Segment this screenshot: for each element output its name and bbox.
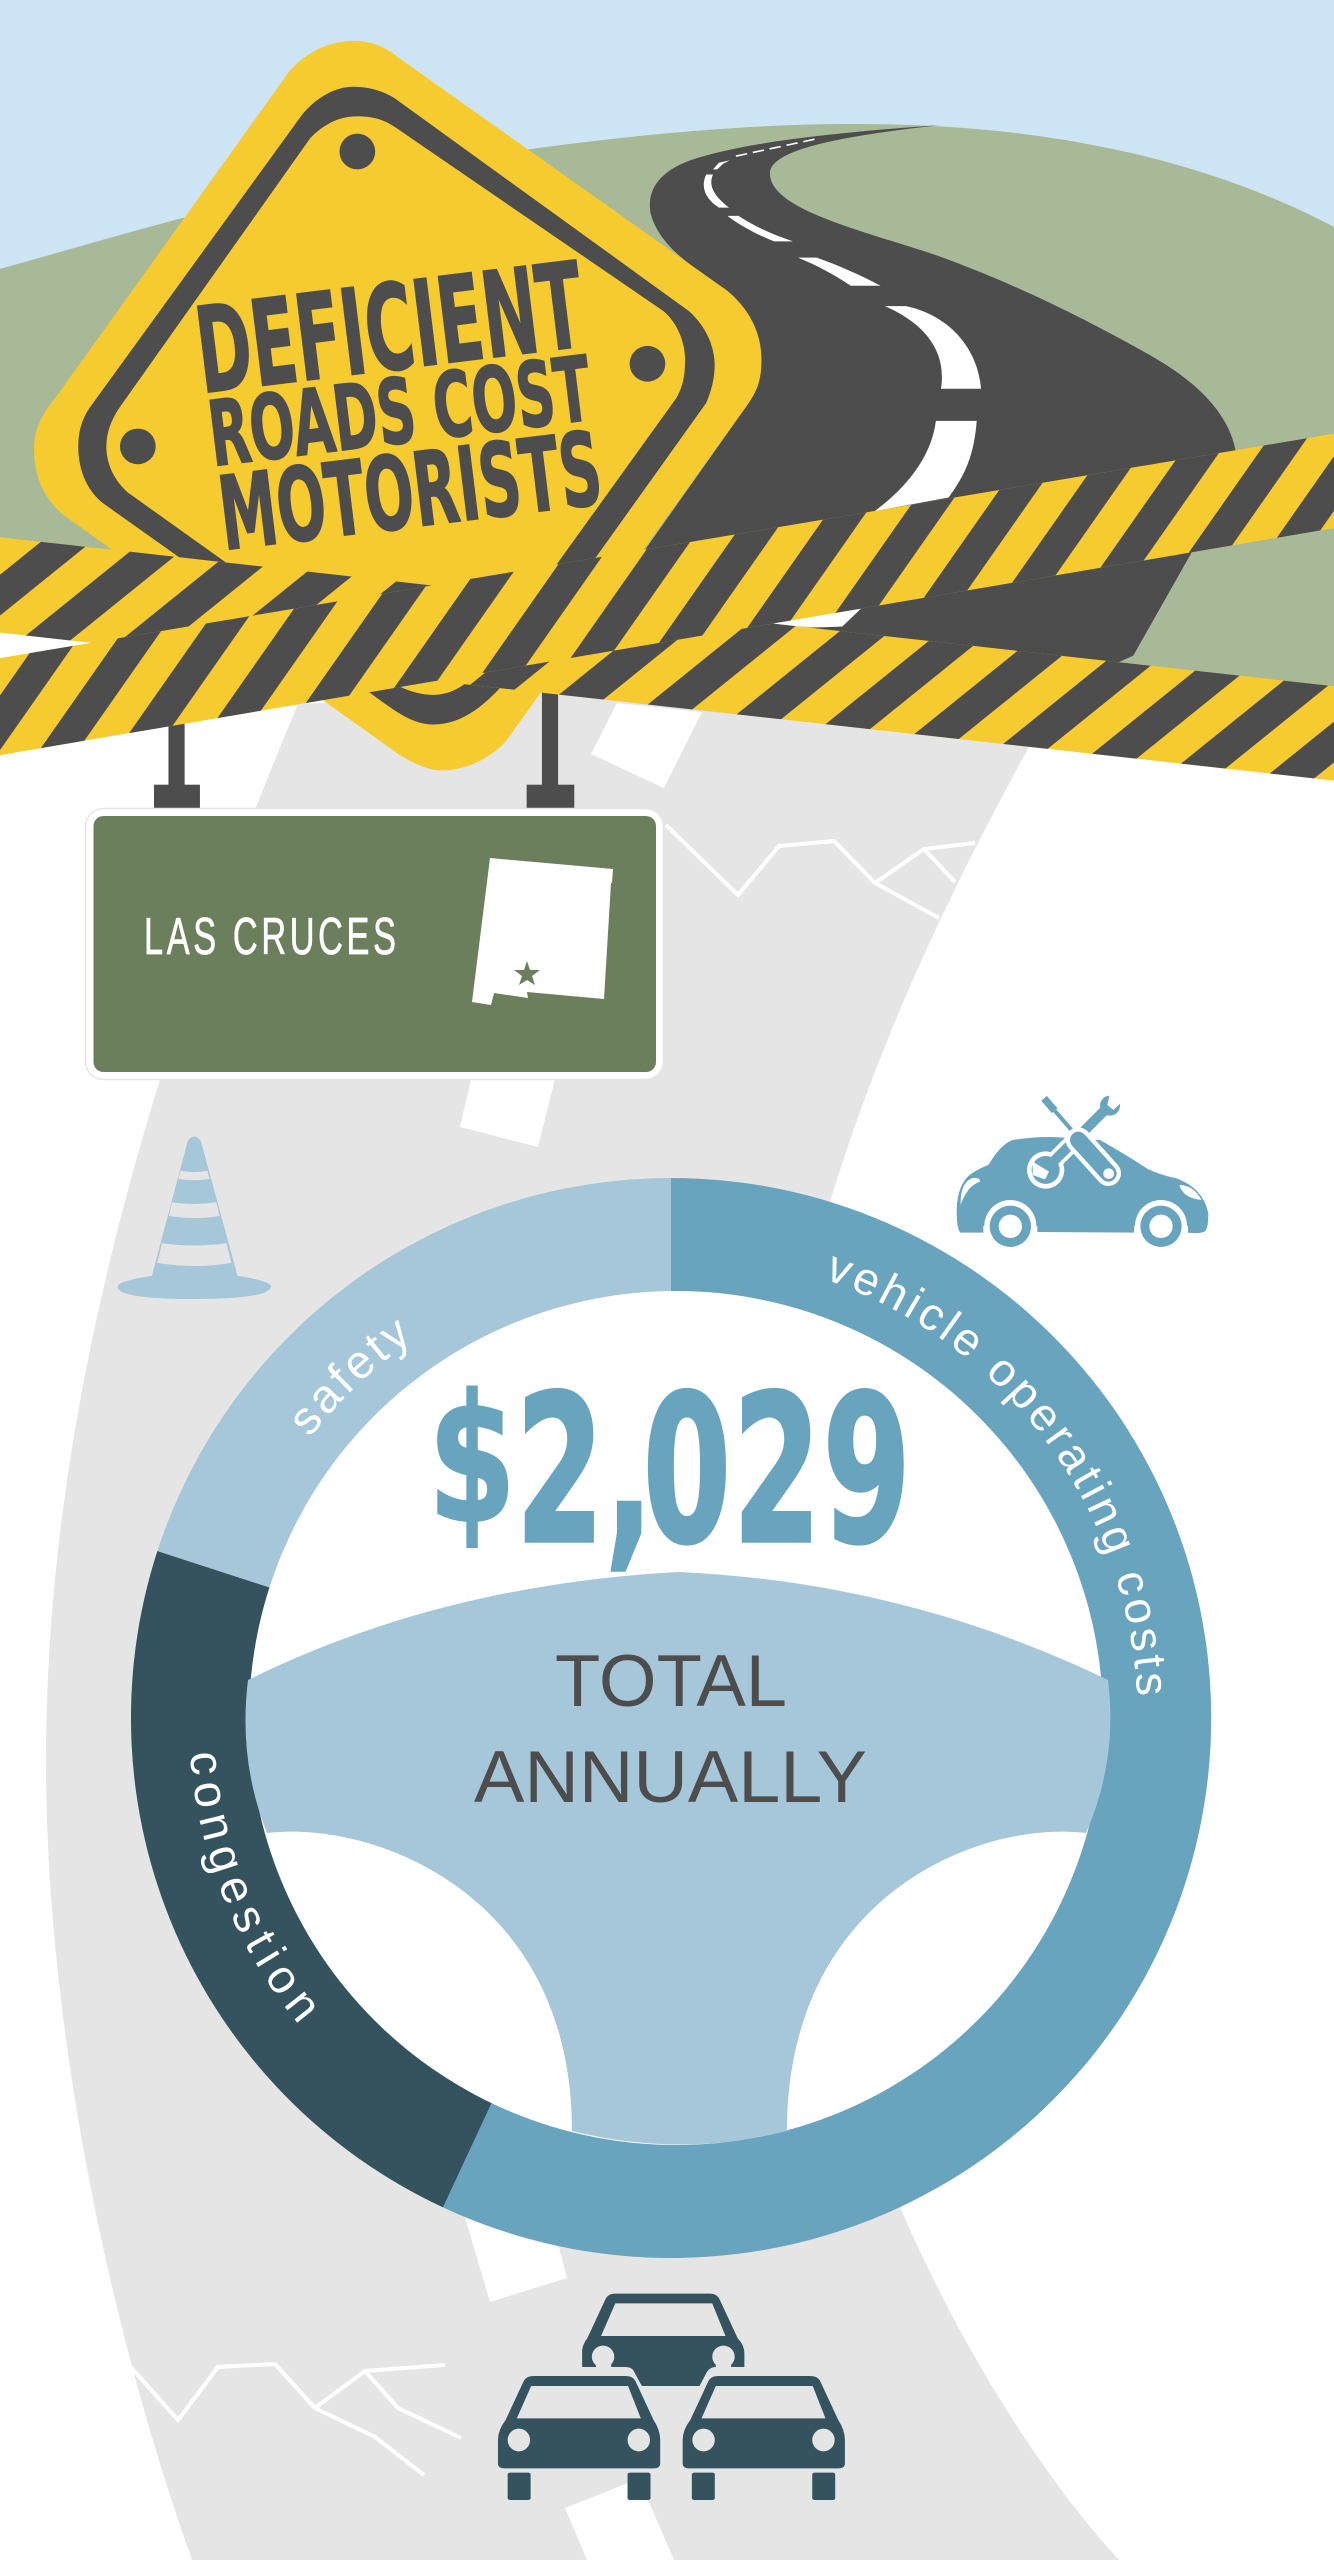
- total caption line 1: TOTAL: [555, 1641, 787, 1722]
- lane dash 3: [457, 2190, 567, 2302]
- title: MOTORISTS: [213, 410, 608, 575]
- caution tape lower band: [0, 537, 1334, 781]
- diamond warning sign: [34, 41, 761, 770]
- label: vehicle operating costs: vehicle operating costs: [832, 1256, 1164, 1694]
- wheel segment: safety: [157, 1178, 671, 1718]
- wheel hub: [245, 1572, 1110, 2144]
- label: safety: safety: [294, 1320, 406, 1434]
- road sign posts: [154, 684, 574, 815]
- lane dash 4: [565, 2483, 674, 2560]
- hills: [0, 124, 1334, 689]
- road markings and cracks: [127, 703, 975, 2560]
- total caption line 2: ANNUALLY: [474, 1737, 867, 1818]
- lane dash 2: [460, 1075, 556, 1147]
- chart: steering wheel donut: [130, 1178, 1212, 2258]
- wheel segment: congestion: [131, 1551, 671, 2207]
- winding road: [642, 125, 1236, 554]
- road lower section: [795, 546, 1195, 663]
- car front left: [498, 2376, 660, 2500]
- lane dash 1: [591, 703, 702, 788]
- panel: highway city sign: [86, 808, 664, 1080]
- title: [189, 238, 608, 575]
- wheel inner disc: [249, 1291, 1103, 2145]
- icon: car with tools: [957, 1093, 1208, 1253]
- title: DEFICIENT: [189, 238, 591, 422]
- icon: traffic congestion cars: [498, 2294, 845, 2500]
- caution tape upper band: [0, 434, 1334, 755]
- car back: [582, 2294, 744, 2386]
- title: ROADS COST: [203, 337, 597, 488]
- city name: LAS CRUCES: [144, 908, 400, 966]
- icon: screwdriver: [1044, 1098, 1114, 1179]
- icon: wrench: [1027, 1093, 1124, 1189]
- total value: $: [428, 1357, 516, 1563]
- sky: [0, 0, 1334, 510]
- white road gap: [770, 609, 861, 627]
- icon: traffic cone: [118, 1136, 271, 1299]
- header illustration: [0, 0, 1334, 815]
- crack top: [666, 825, 975, 918]
- crack bottom: [127, 2363, 461, 2475]
- icon: New Mexico map: [472, 858, 613, 1005]
- total value: 2,029: [516, 1352, 911, 1590]
- label: congestion: congestion: [190, 1754, 314, 2023]
- road centre dashes: [704, 139, 981, 511]
- road: foreground grey road: [46, 690, 1119, 2560]
- car front right: [683, 2376, 845, 2500]
- wheel segment: vehicle operating costs: [443, 1178, 1211, 2258]
